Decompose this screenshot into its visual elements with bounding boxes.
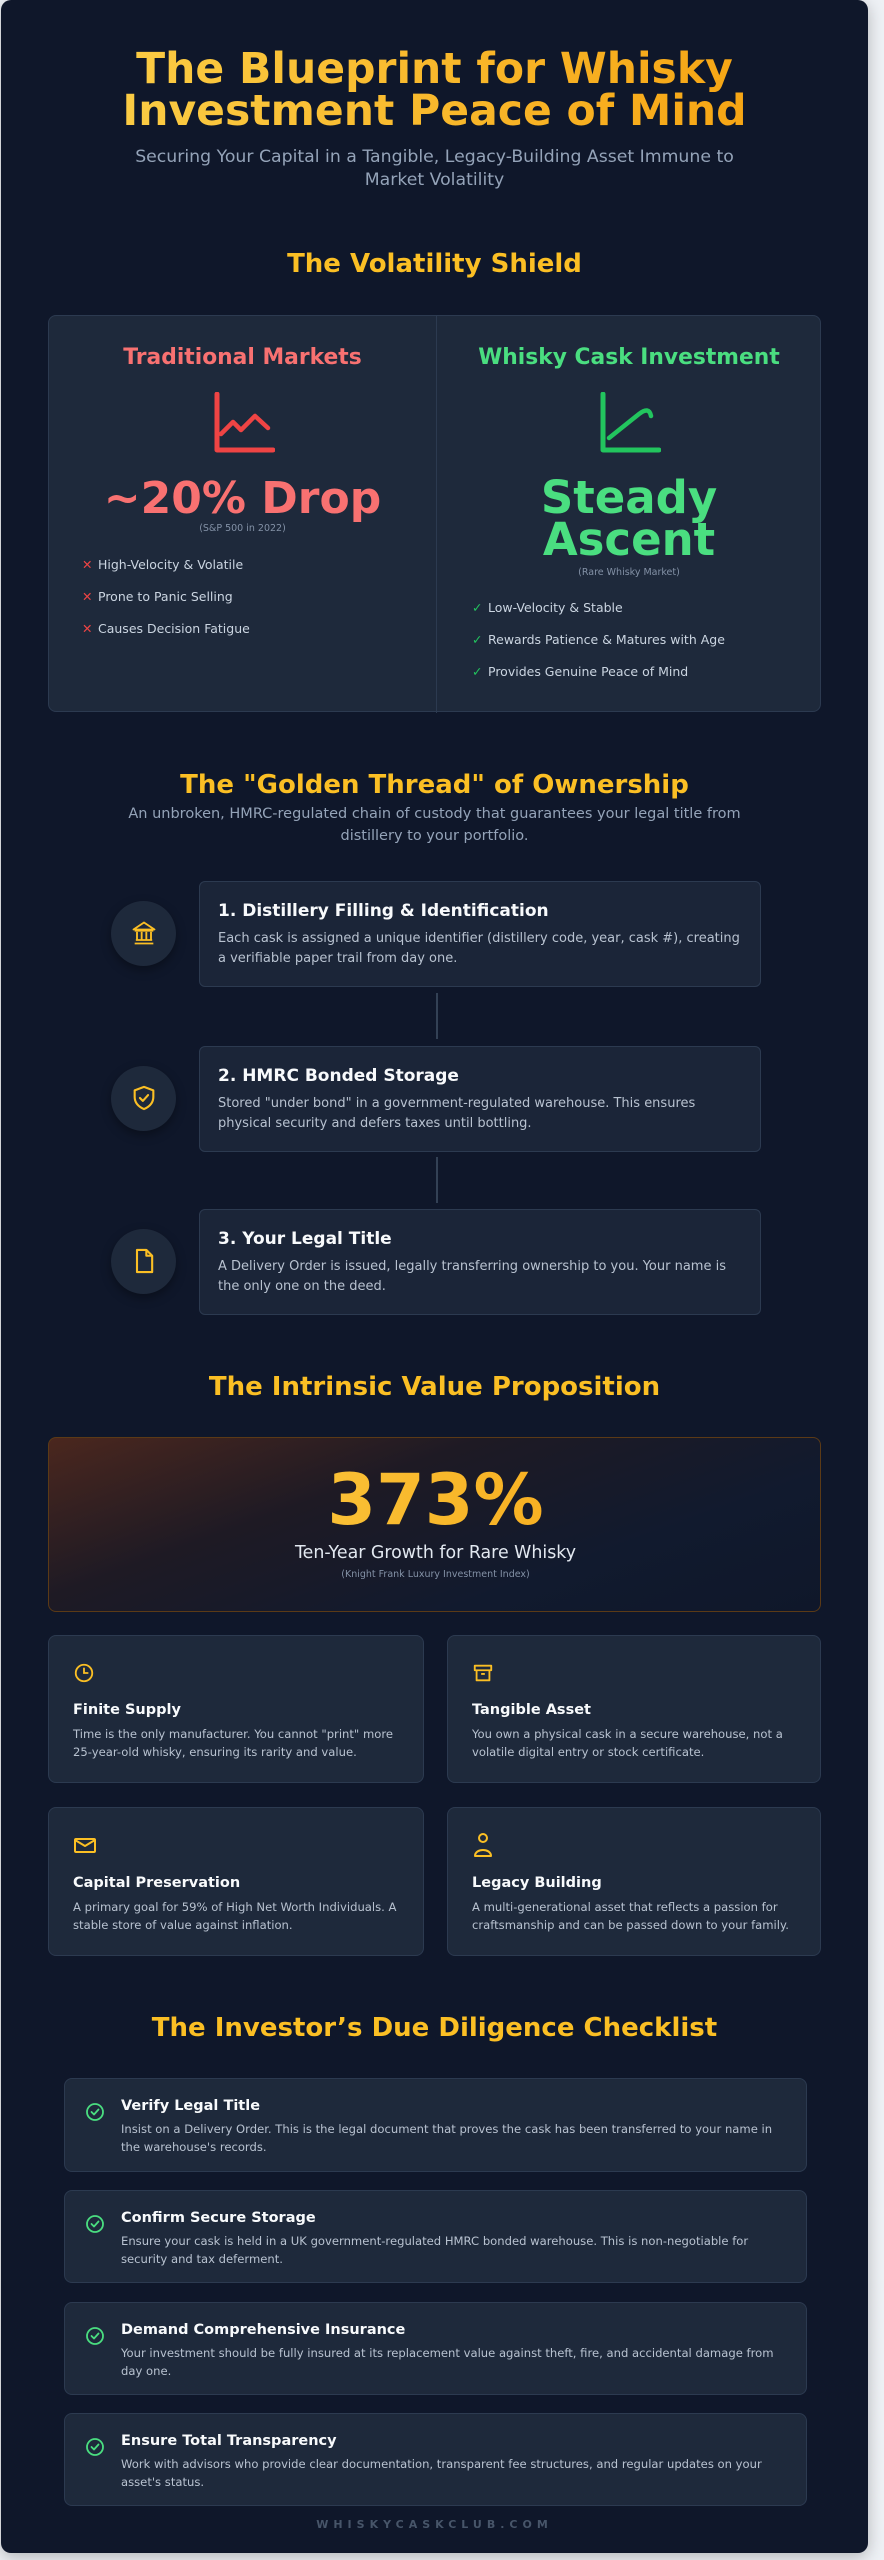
title: The Blueprint for Whisky — [136, 45, 733, 94]
step card 1: a verifiable paper trail from day one. — [218, 951, 457, 966]
checklist item 1: the warehouse's records. — [121, 2140, 267, 2154]
feature: capital preservation: Capital Preservation — [73, 1875, 240, 1891]
step card 2: Stored "under bond" in a government-regulated warehouse. This ensures — [218, 1096, 695, 1111]
checklist item 4: Work with advisors who provide clear documentation, transparent fee structures, and regular updates on your — [121, 2457, 762, 2471]
checklist item 3: Demand Comprehensive Insurance — [121, 2322, 405, 2338]
connector — [436, 1157, 438, 1203]
step card 1: 1. Distillery Filling & Identification — [218, 901, 549, 921]
icon: falling chart — [214, 392, 275, 452]
step card 2: physical security and defers taxes until bottling. — [218, 1116, 532, 1131]
step 1 — [111, 881, 761, 987]
bullet list: cons — [82, 557, 250, 636]
golden thread subtitle — [128, 806, 741, 844]
icon: clock — [74, 1664, 94, 1682]
feature: finite supply — [48, 1635, 424, 1783]
stat: steady ascent: Ascent — [543, 513, 715, 566]
bullet list: pros — [472, 600, 725, 679]
column: whisky cask — [472, 345, 780, 679]
feature: tangible asset: Tangible Asset — [472, 1702, 591, 1718]
checklist item 1: Insist on a Delivery Order. This is the legal document that proves the cask has been transferred to your name in — [121, 2122, 772, 2136]
bullet list: pros: ✓ — [472, 632, 482, 647]
big number — [49, 1461, 822, 1539]
heading: volatility shield: The Volatility Shield — [287, 249, 582, 279]
step 2 — [111, 1046, 761, 1152]
checklist item 2: Ensure your cask is held in a UK government-regulated HMRC bonded warehouse. This is non-negotiable for — [121, 2234, 748, 2248]
icon: check circle — [86, 2103, 104, 2121]
feature: capital preservation — [48, 1807, 424, 1956]
golden thread subtitle: An unbroken, HMRC-regulated chain of custody that guarantees your legal title from — [128, 806, 741, 822]
icon: distillery building — [111, 901, 176, 966]
source note: (S&P 500 in 2022) — [199, 523, 286, 534]
feature: finite supply: 25-year-old whisky, ensuring its rarity and value. — [73, 1745, 357, 1759]
source note: (Rare Whisky Market) — [578, 567, 680, 578]
checklist item 2: Confirm Secure Storage — [121, 2210, 316, 2226]
step card 3: A Delivery Order is issued, legally transferring ownership to you. Your name is — [218, 1259, 726, 1274]
heading: golden thread: The "Golden Thread" of Ownership — [180, 770, 689, 800]
checklist item 3 — [64, 2302, 807, 2395]
bullet list: pros: ✓ — [472, 664, 482, 679]
subtitle: Securing Your Capital in a Tangible, Legacy-Building Asset Immune to — [135, 147, 734, 167]
icon: archive box — [474, 1664, 492, 1682]
connector — [436, 993, 438, 1039]
bullet list: pros: Provides Genuine Peace of Mind — [488, 664, 688, 679]
icon: envelope — [74, 1838, 96, 1853]
step card 1: Each cask is assigned a unique identifier (distillery code, year, cask #), creating — [218, 931, 740, 946]
panel: comparison — [48, 315, 821, 712]
feature: tangible asset — [447, 1635, 821, 1783]
step card 3 — [199, 1209, 761, 1315]
golden thread subtitle: distillery to your portfolio. — [340, 828, 528, 844]
heading: traditional markets: Traditional Markets — [123, 345, 362, 370]
feature: tangible asset: You own a physical cask in a secure warehouse, not a — [472, 1727, 783, 1741]
divider — [436, 316, 437, 713]
heading: intrinsic value: The Intrinsic Value Proposition — [209, 1372, 660, 1402]
bullet list: cons: High-Velocity & Volatile — [98, 557, 243, 572]
heading: whisky cask investment: Whisky Cask Investment — [478, 345, 780, 370]
step card 3: the only one on the deed. — [218, 1279, 386, 1294]
bullet list: cons: ✕ — [82, 589, 92, 604]
bullet list: cons: Prone to Panic Selling — [98, 589, 233, 604]
feature: legacy building — [447, 1807, 821, 1956]
icon: check circle — [86, 2327, 104, 2345]
feature: legacy building: craftsmanship and can be passed down to your family. — [472, 1918, 789, 1932]
icon: shield check — [111, 1066, 176, 1131]
bullet list: pros: Rewards Patience & Matures with Age — [488, 632, 725, 647]
stat: -20% drop: ~20% Drop — [104, 473, 381, 524]
checklist item 3: Your investment should be fully insured at its replacement value against theft, fire, and accidental damage from — [121, 2346, 774, 2360]
feature: capital preservation: A primary goal for 59% of High Net Worth Individuals. A — [73, 1900, 396, 1914]
stat box: 373% — [48, 1437, 821, 1612]
icon: check circle — [86, 2438, 104, 2456]
subtitle — [135, 147, 734, 190]
source: (Knight Frank Luxury Investment Index) — [341, 1569, 530, 1580]
step card 2 — [199, 1046, 761, 1152]
title — [1, 49, 868, 133]
checklist item 2 — [64, 2190, 807, 2283]
feature: legacy building: Legacy Building — [472, 1875, 602, 1891]
bullet list: cons: ✕ — [82, 621, 92, 636]
checklist item 4: asset's status. — [121, 2475, 204, 2489]
big number: 373% — [327, 1459, 544, 1541]
title: Investment Peace of Mind — [122, 87, 747, 136]
checklist item 4 — [64, 2413, 807, 2506]
bullet list: pros: Low-Velocity & Stable — [488, 600, 623, 615]
subtitle: Market Volatility — [365, 170, 504, 190]
heading: checklist: The Investor’s Due Diligence Checklist — [152, 2013, 717, 2043]
icon: check circle — [86, 2215, 104, 2233]
checklist item 1 — [64, 2078, 807, 2172]
step card 3: 3. Your Legal Title — [218, 1229, 392, 1249]
column: traditional markets — [82, 345, 381, 636]
caption: Ten-Year Growth for Rare Whisky — [295, 1543, 576, 1563]
bullet list: pros: ✓ — [472, 600, 482, 615]
icon: person — [474, 1833, 492, 1857]
feature: finite supply: Time is the only manufacturer. You cannot "print" more — [73, 1727, 393, 1741]
step card 1 — [199, 881, 761, 987]
checklist item 4: Ensure Total Transparency — [121, 2433, 337, 2449]
feature: legacy building: A multi-generational asset that reflects a passion for — [472, 1900, 778, 1914]
footer: WHISKYCASKCLUB.COM — [316, 2518, 553, 2531]
bullet list: cons: ✕ — [82, 557, 92, 572]
feature: capital preservation: stable store of value against inflation. — [73, 1918, 293, 1932]
stat: steady ascent: Steady — [541, 471, 717, 524]
icon: rising chart — [600, 392, 661, 452]
stat: steady ascent — [541, 471, 717, 566]
feature: finite supply: Finite Supply — [73, 1702, 181, 1718]
feature: tangible asset: volatile digital entry or stock certificate. — [472, 1745, 704, 1759]
checklist item 2: security and tax deferment. — [121, 2252, 283, 2266]
step 3 — [111, 1209, 761, 1315]
icon: document — [111, 1229, 176, 1294]
step card 2: 2. HMRC Bonded Storage — [218, 1066, 459, 1086]
bullet list: cons: Causes Decision Fatigue — [98, 621, 250, 636]
checklist item 3: day one. — [121, 2364, 171, 2378]
checklist item 1: Verify Legal Title — [121, 2098, 260, 2114]
